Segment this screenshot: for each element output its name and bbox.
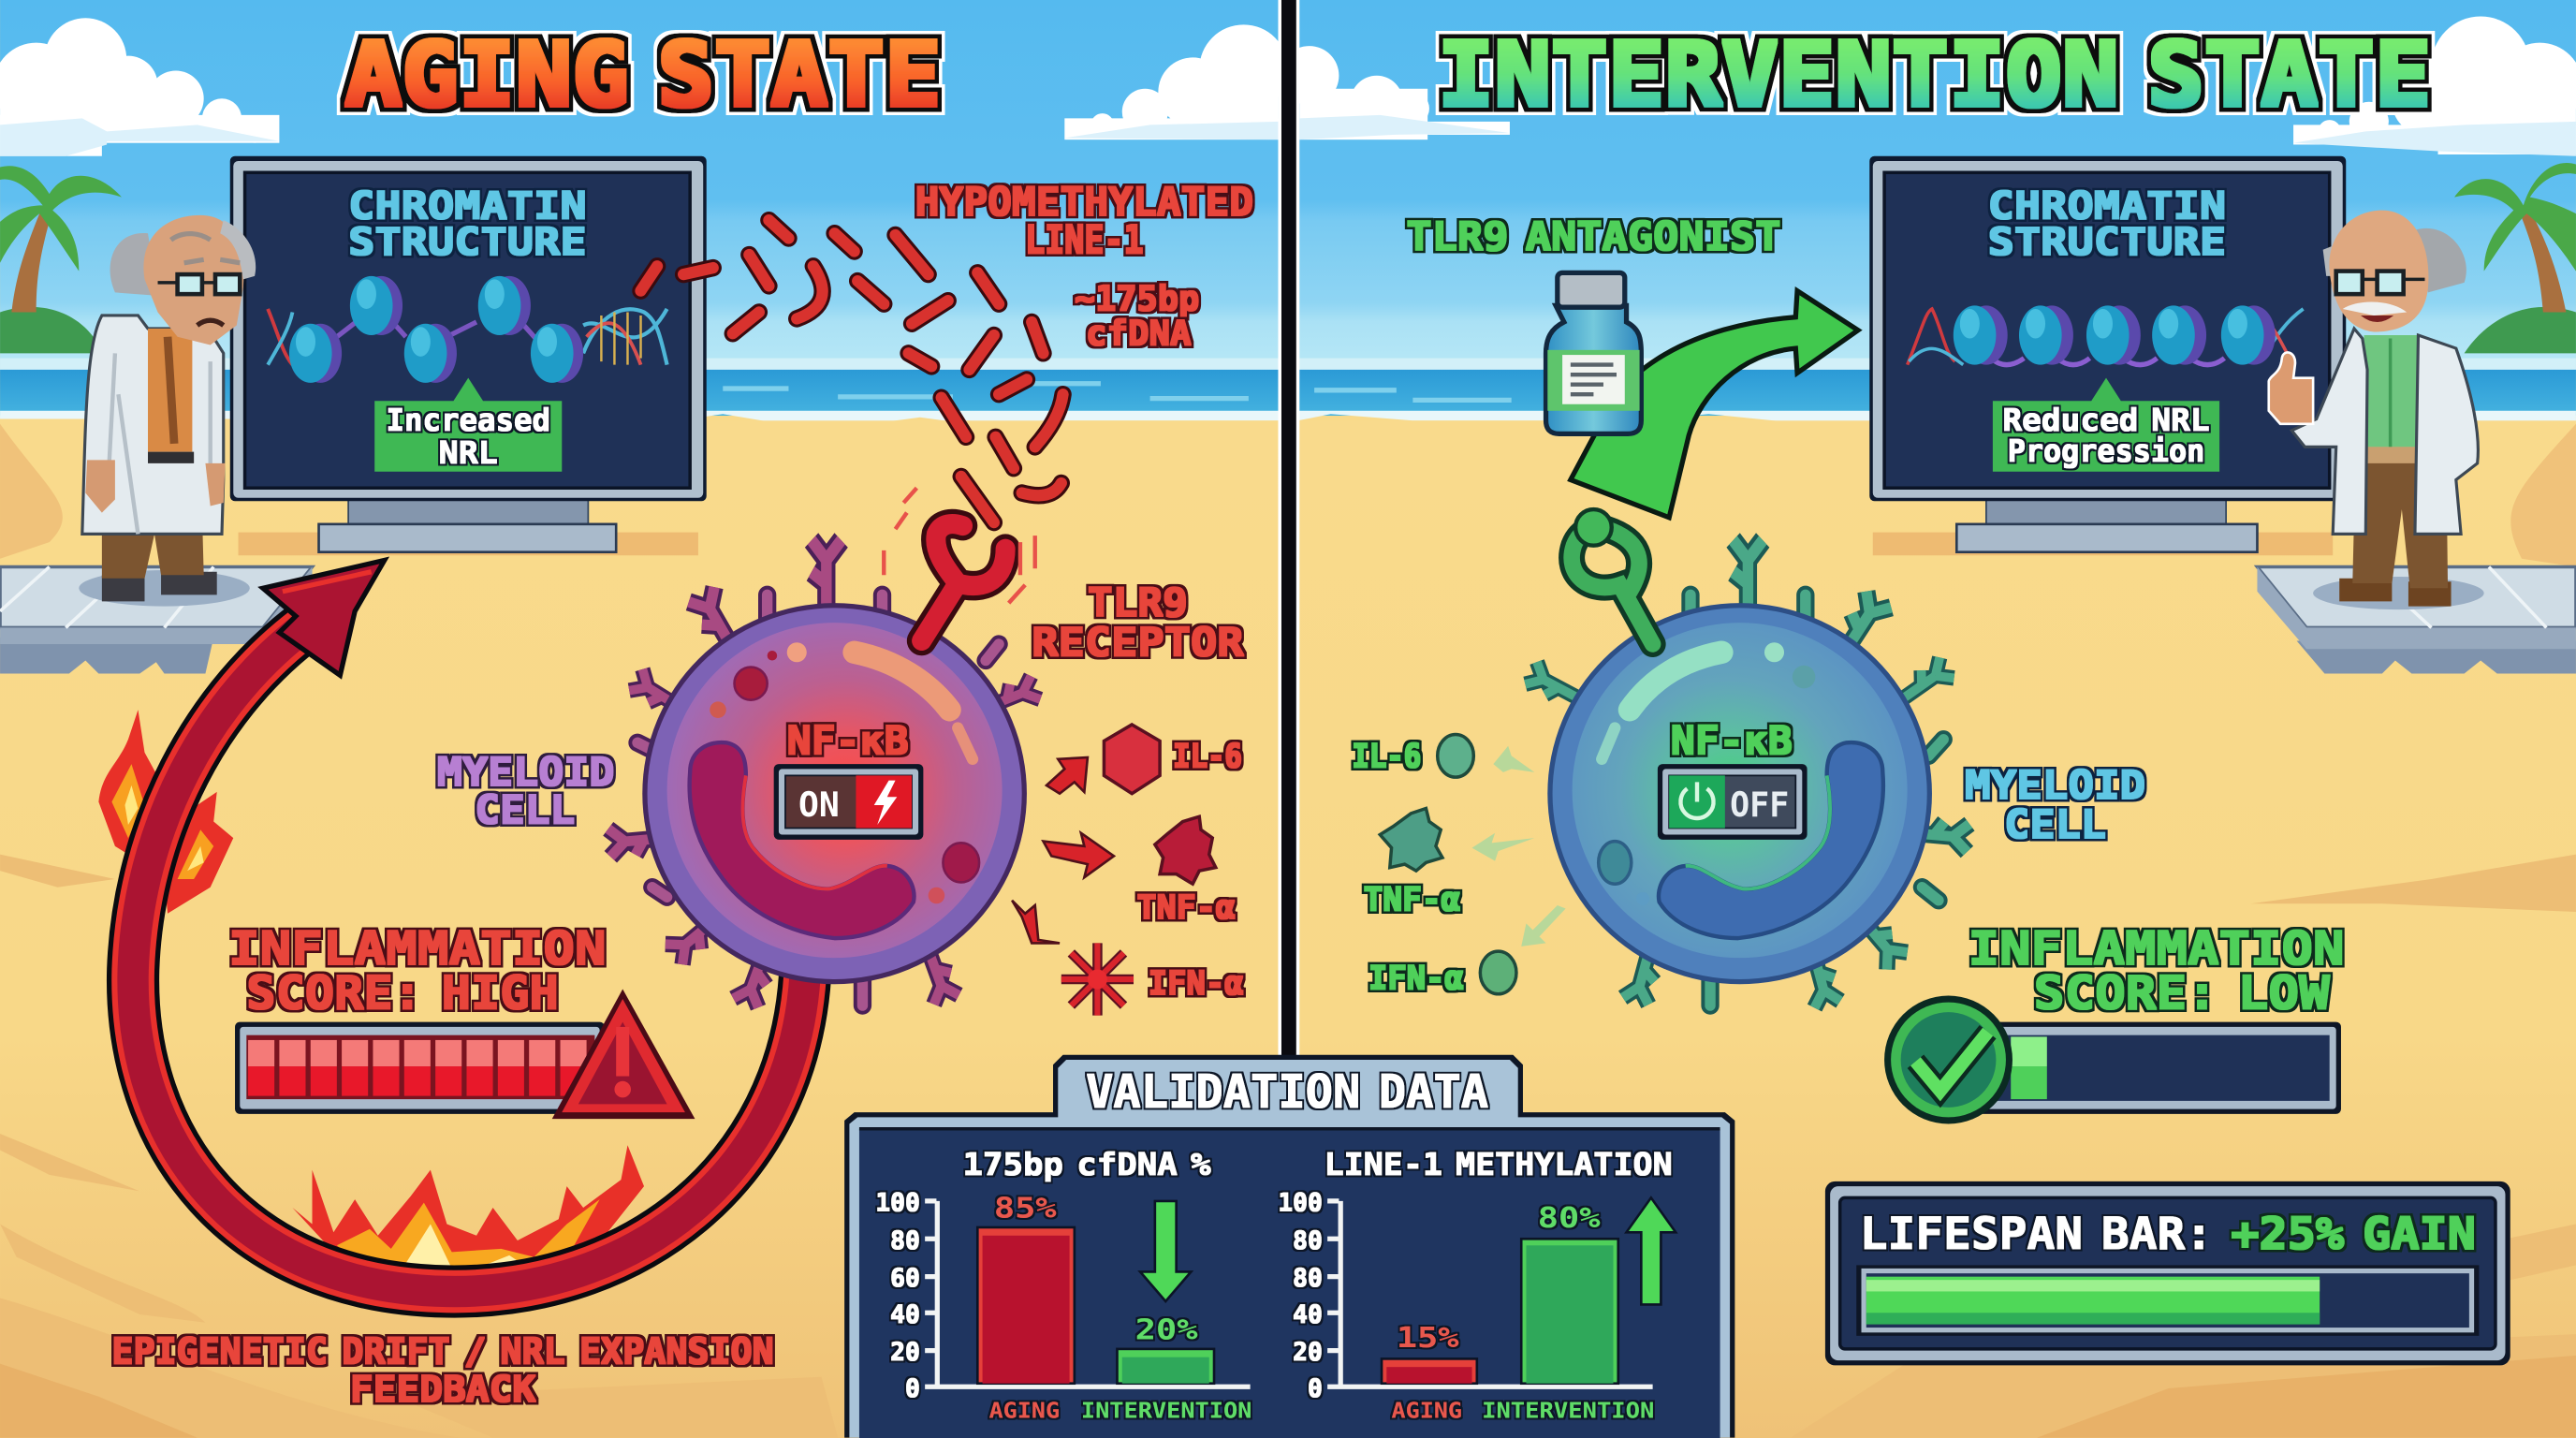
label: myeloid cell intervention [1965,762,2145,847]
chart: 175bp cfDNA [875,1146,1251,1424]
heading: chromatin structure: CHROMATIN [1988,183,2226,227]
heading: lifespan gain [1860,1209,2476,1260]
chart: 175bp cfDNA: AGING [989,1400,1060,1424]
myeloid cell: intervention [1525,540,1969,1008]
chart: LINE-1 methylation: 80 [1293,1265,1323,1293]
chart: 175bp cfDNA: 20% [1135,1313,1198,1346]
heading: lifespan gain: LIFESPAN BAR: [1860,1209,2213,1260]
panel: validation data [844,1055,1734,1438]
monitor: intervention chromatin [1869,156,2346,555]
label: myeloid cell intervention: CELL [2004,801,2106,847]
callout: reduced NRL progression [1993,378,2219,472]
callout: increased NRL: NRL [439,434,498,471]
scientist: intervention [2269,211,2478,607]
chart: LINE-1 methylation: 20 [1293,1339,1323,1367]
label: NF-kB aging: NF-κB [787,718,909,764]
TLR9 receptor: blocked [1572,509,1653,644]
monitor: intervention chromatin: STRUCTURE [1988,220,2226,264]
label: 175bp cfDNA: ~175bp [1075,279,1199,319]
chart: LINE-1 methylation: 0 [1308,1375,1323,1403]
cloud: aging left [0,18,279,156]
switch: NF-kB off [1658,764,1808,840]
myeloid cell: aging [608,540,1040,1007]
chart: 175bp cfDNA: 175bp cfDNA % [963,1146,1211,1182]
label: myeloid cell intervention: MYELOID [1965,762,2145,808]
divider line [1278,0,1299,1068]
cloud: aging right [1064,24,1288,139]
chart: LINE-1 methylation: 80 [1293,1227,1323,1255]
chart: 175bp cfDNA: 80 [890,1227,920,1255]
caption: feedback loop [111,1331,774,1411]
chart: 175bp cfDNA: 100 [875,1189,920,1217]
caption: feedback loop: EPIGENETIC DRIFT / NRL EXPANSION [111,1331,774,1373]
cytokine: IFN-a low: IFN-α [1368,960,1464,998]
monitor: aging chromatin: STRUCTURE [348,220,587,264]
chromatin: compact nucleosomes [1908,305,2304,365]
cytokine: IL-6 low [1352,734,1534,777]
cytokine: IFN-a low [1368,905,1566,998]
flames: bottom of loop [292,1145,644,1273]
chart: LINE-1 methylation: 100 [1278,1189,1323,1217]
chart: LINE-1 methylation: LINE-1 METHYLATION [1325,1146,1673,1182]
feedback loop arrow [133,560,805,1292]
callout: increased NRL: Increased [386,402,550,438]
caption: feedback loop: FEEDBACK [350,1369,536,1411]
callout: reduced NRL progression: Reduced NRL [2002,402,2210,438]
label: TLR9 antagonist: TLR9 ANTAGONIST [1406,213,1781,259]
heading: lifespan gain: +25% GAIN [2231,1209,2476,1260]
chart: 175bp cfDNA: 0 [905,1375,920,1403]
platform: left [0,566,313,674]
chart: 175bp cfDNA: 40 [890,1301,920,1329]
platform: right [2257,566,2576,674]
scientist: aging [82,215,256,601]
switch: NF-kB off: OFF [1730,785,1789,825]
switch: NF-kB on [774,764,923,840]
chart: LINE-1 methylation: 80% [1538,1202,1601,1235]
chart: 175bp cfDNA: 85% [994,1192,1057,1225]
chart: 175bp cfDNA: 20 [890,1339,920,1367]
cytokine: IL-6 high: IL-6 [1173,738,1242,776]
cytokine: IL-6 high [1046,725,1242,794]
monitor: aging chromatin [230,156,707,555]
heading: chromatin structure: CHROMATIN [348,183,587,227]
label: myeloid cell aging [437,749,614,832]
flames: left of loop [98,710,233,914]
cytokine: IFN-a high [1012,901,1244,1016]
palm tree: left [0,166,122,353]
chart: LINE-1 methylation: INTERVENTION [1482,1400,1654,1424]
arrow: antagonist to monitor [1571,291,1858,518]
palm tree: right [2454,163,2576,353]
cytokine: IL-6 low: IL-6 [1352,738,1421,776]
cloud: intervention left [1280,46,1510,139]
cytokine: TNF-a low [1364,808,1534,918]
label: TLR9 receptor: TLR9 [1088,580,1188,625]
cytokine: TNF-a high: TNF-α [1137,888,1236,927]
chart: 175bp cfDNA: 60 [890,1265,920,1293]
callout: reduced NRL progression: Progression [2008,433,2204,469]
chart: LINE-1 methylation: AGING [1392,1400,1462,1424]
chart: LINE-1 methylation: 15% [1397,1322,1459,1355]
callout: increased NRL [374,378,562,472]
label: 175bp cfDNA [1075,279,1199,354]
title: intervention state: INTERVENTION STATE [1438,23,2431,126]
label: hypomethylated LINE-1: HYPOMETHYLATED [915,179,1253,225]
chart: LINE-1 methylation [1278,1146,1676,1424]
inflammation score: low [1955,921,2344,1114]
inflammation score: low: INFLAMMATION [1969,921,2344,976]
label: 175bp cfDNA: cfDNA [1086,314,1191,354]
cytokine: IFN-a high: IFN-α [1149,964,1244,1003]
cloud: intervention right [2293,17,2576,156]
label: hypomethylated LINE-1 [915,179,1253,262]
cfDNA fragments [641,220,1063,522]
switch: NF-kB on: ON [798,785,840,825]
heading: validation data: VALIDATION DATA [1086,1064,1488,1119]
lifespan progress bar [1856,1265,2479,1336]
chart: 175bp cfDNA: INTERVENTION [1081,1400,1251,1424]
icon: checkmark badge [1884,996,2012,1123]
icon: warning triangle [552,990,695,1119]
label: hypomethylated LINE-1: LINE-1 [1025,216,1144,262]
inflammation score: high [228,921,607,1114]
label: TLR9 receptor: RECEPTOR [1032,619,1244,665]
TLR9 receptor: activated [884,488,1035,640]
inflammation score: high: INFLAMMATION [228,921,607,976]
label: TLR9 receptor [1032,580,1244,665]
title: aging state: AGING STATE [345,23,942,126]
label: myeloid cell aging: MYELOID [437,749,614,795]
chart: LINE-1 methylation: 40 [1293,1301,1323,1329]
inflammation score: low: SCORE: LOW [2034,966,2330,1020]
icon: drug vial [1546,272,1641,433]
cytokine: TNF-a high [1044,816,1236,927]
label: myeloid cell aging: CELL [475,786,575,832]
cytokine: TNF-a low: TNF-α [1364,880,1460,918]
inflammation score: high: SCORE: HIGH [246,966,559,1020]
panel: lifespan bar [1825,1181,2510,1365]
label: NF-kB intervention: NF-κB [1671,718,1793,764]
chromatin: expanded nucleosomes [268,276,667,383]
